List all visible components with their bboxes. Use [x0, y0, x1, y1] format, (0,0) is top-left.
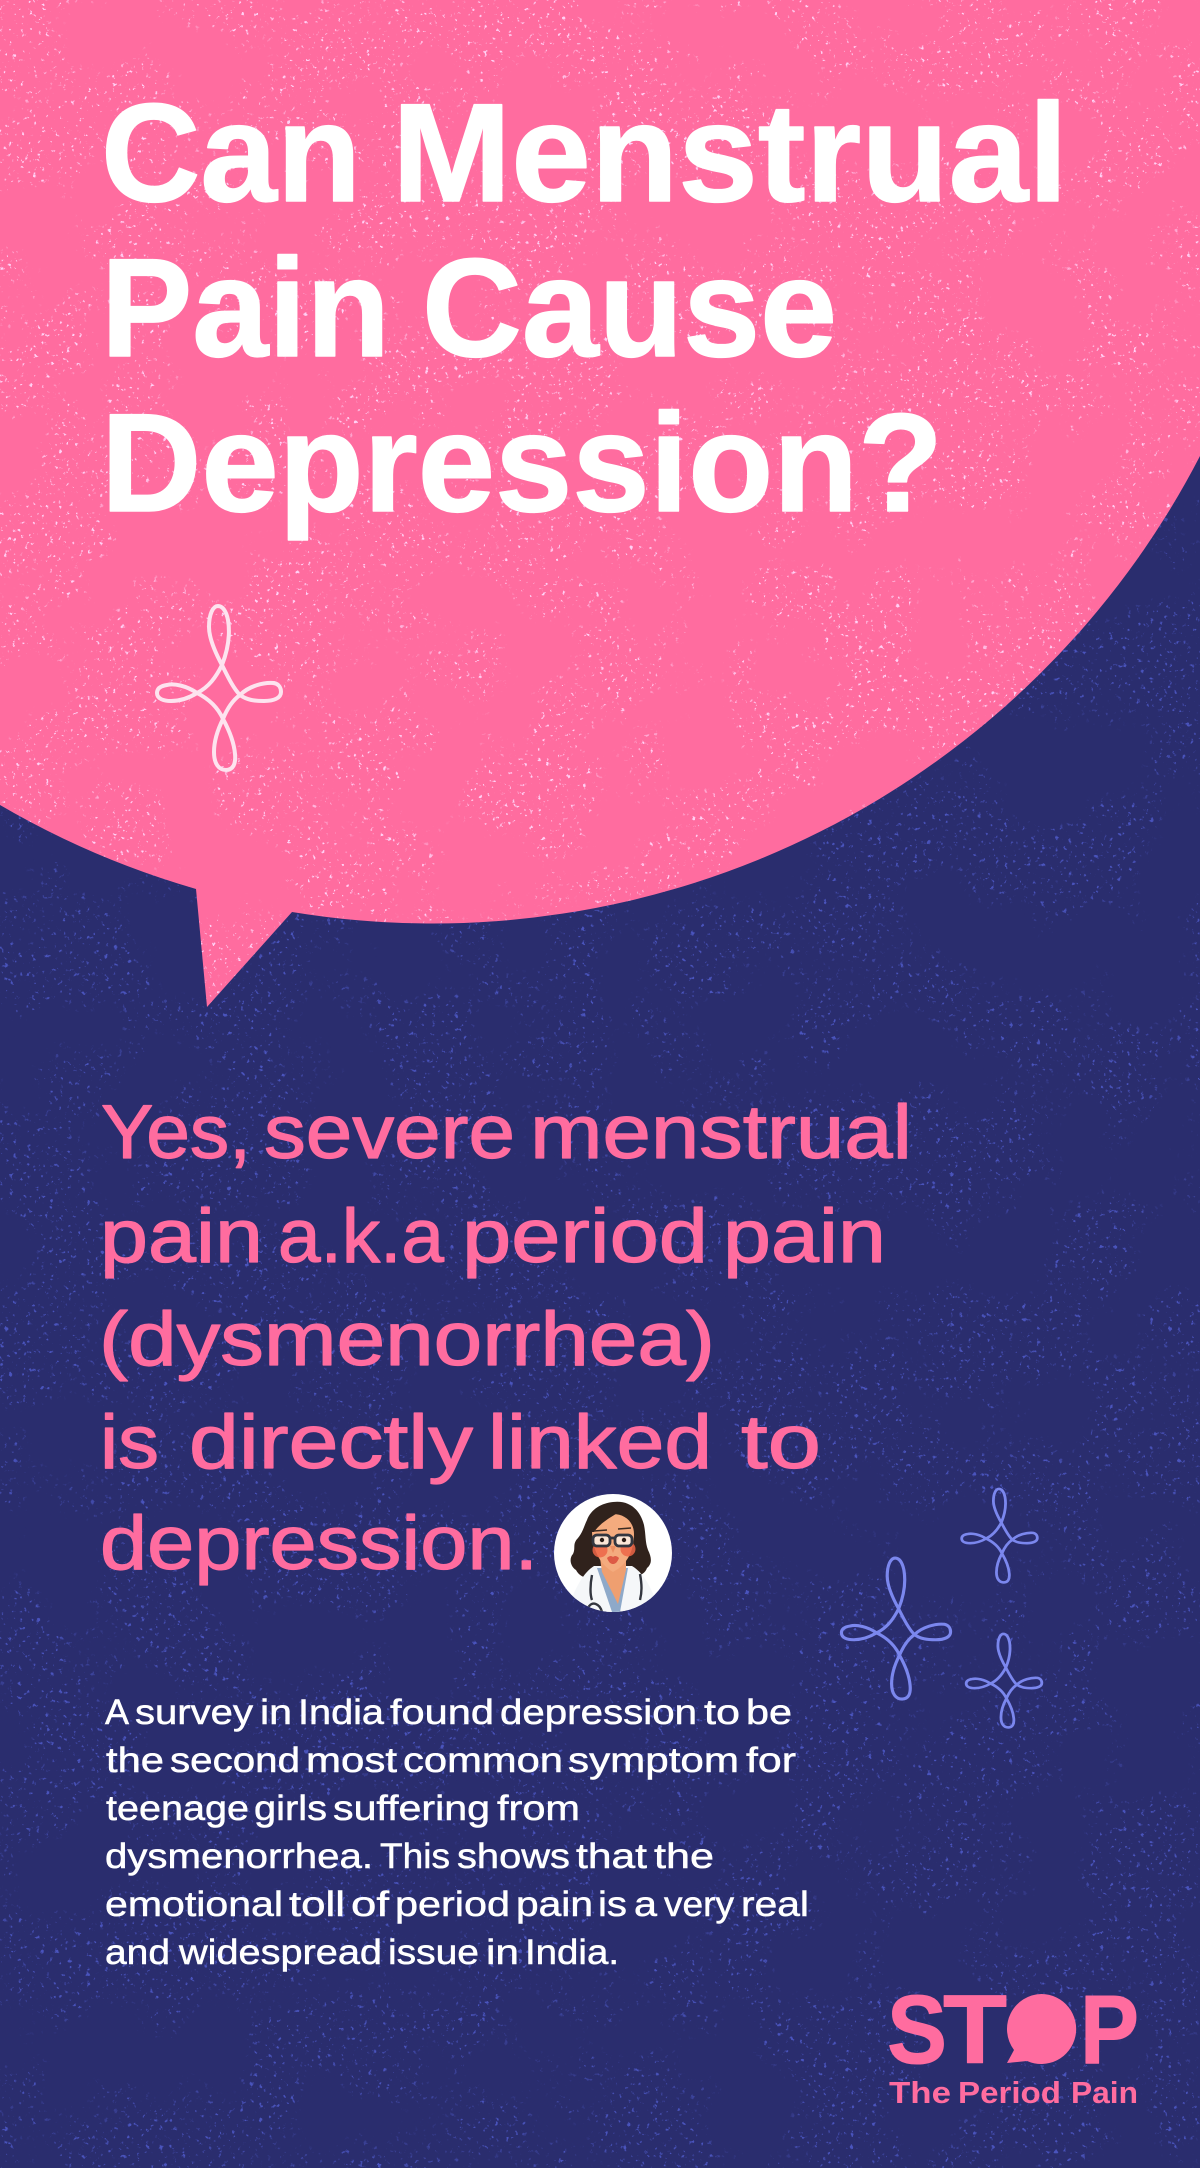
- body paragraph: girls: [254, 1789, 327, 1828]
- body paragraph: emotional: [105, 1885, 283, 1924]
- icon: upper small blue sparkle: [962, 1489, 1037, 1582]
- body paragraph: A: [105, 1693, 130, 1732]
- pupils: [600, 1538, 604, 1542]
- title: Depression?: [101, 384, 943, 541]
- icon: doctor avatar: [554, 1494, 672, 1615]
- body paragraph: shows: [457, 1837, 570, 1876]
- body paragraph: is: [598, 1885, 627, 1924]
- subheading answer: a.k.a: [278, 1194, 445, 1279]
- body paragraph: teenage: [106, 1789, 249, 1828]
- body paragraph: from: [497, 1789, 580, 1828]
- title: Can: [101, 74, 361, 231]
- body paragraph: symptom: [568, 1741, 739, 1780]
- icon: pink sparkle: [157, 606, 281, 770]
- body paragraph: common: [403, 1741, 563, 1780]
- logo: STOP The Period Pain: [887, 1975, 1139, 2110]
- subheading answer: depression.: [100, 1501, 538, 1586]
- logo: STOP The Period Pain: S: [887, 1975, 947, 2084]
- body paragraph: in: [486, 1933, 519, 1972]
- body paragraph: toll: [289, 1885, 345, 1924]
- cheeks: [592, 1546, 608, 1558]
- subheading answer: directly: [189, 1400, 473, 1485]
- body paragraph: widespread: [178, 1933, 382, 1972]
- pink speech bubble: [0, 0, 1200, 1010]
- body paragraph: India.: [525, 1933, 619, 1972]
- scrubs: [597, 1568, 628, 1612]
- title: Menstrual: [392, 74, 1068, 231]
- body paragraph: to: [704, 1693, 740, 1732]
- body paragraph: [105, 1693, 809, 1972]
- body paragraph: second: [170, 1741, 300, 1780]
- subheading answer: pain: [723, 1194, 886, 1279]
- subheading answer: pain: [100, 1194, 263, 1279]
- neck: [600, 1558, 626, 1604]
- body paragraph: pain: [516, 1885, 593, 1924]
- body paragraph: be: [746, 1693, 792, 1732]
- icon: large blue sparkle: [841, 1558, 951, 1699]
- subheading answer: severe: [264, 1090, 515, 1175]
- body paragraph: dysmenorrhea.: [105, 1837, 373, 1876]
- logo: STOP The Period Pain: T: [943, 1975, 1007, 2084]
- body paragraph: a: [634, 1885, 658, 1924]
- subheading answer: menstrual: [530, 1090, 912, 1175]
- body paragraph: most: [306, 1741, 397, 1780]
- subheading answer: Yes,: [101, 1090, 251, 1175]
- body paragraph: the: [654, 1837, 714, 1876]
- subheading answer: to: [741, 1400, 821, 1485]
- glasses: [593, 1535, 632, 1546]
- subheading answer: (dysmenorrhea): [99, 1297, 715, 1382]
- logo speech bubble O: [1007, 1994, 1076, 2064]
- body paragraph: that: [576, 1837, 647, 1876]
- body paragraph: issue: [388, 1933, 479, 1972]
- body paragraph: depression: [500, 1693, 697, 1732]
- fringe: [592, 1514, 616, 1532]
- hair: [571, 1502, 651, 1578]
- brows: [594, 1528, 631, 1531]
- logo: STOP The Period Pain: The: [889, 2075, 951, 2110]
- body paragraph: very: [664, 1885, 735, 1924]
- logo: STOP The Period Pain: Period: [958, 2075, 1061, 2110]
- stethoscope: [588, 1574, 642, 1612]
- body paragraph: found: [390, 1693, 494, 1732]
- subheading answer: [99, 1090, 912, 1586]
- lips: [607, 1556, 619, 1564]
- coat: [572, 1566, 654, 1612]
- subheading answer: is: [100, 1400, 159, 1485]
- body paragraph: period: [395, 1885, 510, 1924]
- body paragraph: the: [106, 1741, 164, 1780]
- face: [592, 1514, 634, 1572]
- body paragraph: suffering: [333, 1789, 490, 1828]
- logo: STOP The Period Pain: P: [1080, 1975, 1139, 2084]
- body paragraph: for: [746, 1741, 796, 1780]
- body paragraph: survey: [135, 1693, 254, 1732]
- body paragraph: of: [351, 1885, 389, 1924]
- subheading answer: linked: [488, 1400, 712, 1485]
- subheading answer: period: [462, 1194, 708, 1279]
- title: [101, 74, 1068, 541]
- logo: STOP The Period Pain: Pain: [1071, 2075, 1138, 2110]
- body paragraph: in: [260, 1693, 292, 1732]
- title: Pain: [101, 229, 390, 386]
- body paragraph: This: [380, 1837, 450, 1876]
- body paragraph: and: [105, 1933, 170, 1972]
- body paragraph: India: [298, 1693, 385, 1732]
- body paragraph: real: [741, 1885, 809, 1924]
- nose: [610, 1546, 616, 1553]
- title: Cause: [422, 229, 837, 386]
- icon: lower small blue sparkle: [966, 1634, 1042, 1727]
